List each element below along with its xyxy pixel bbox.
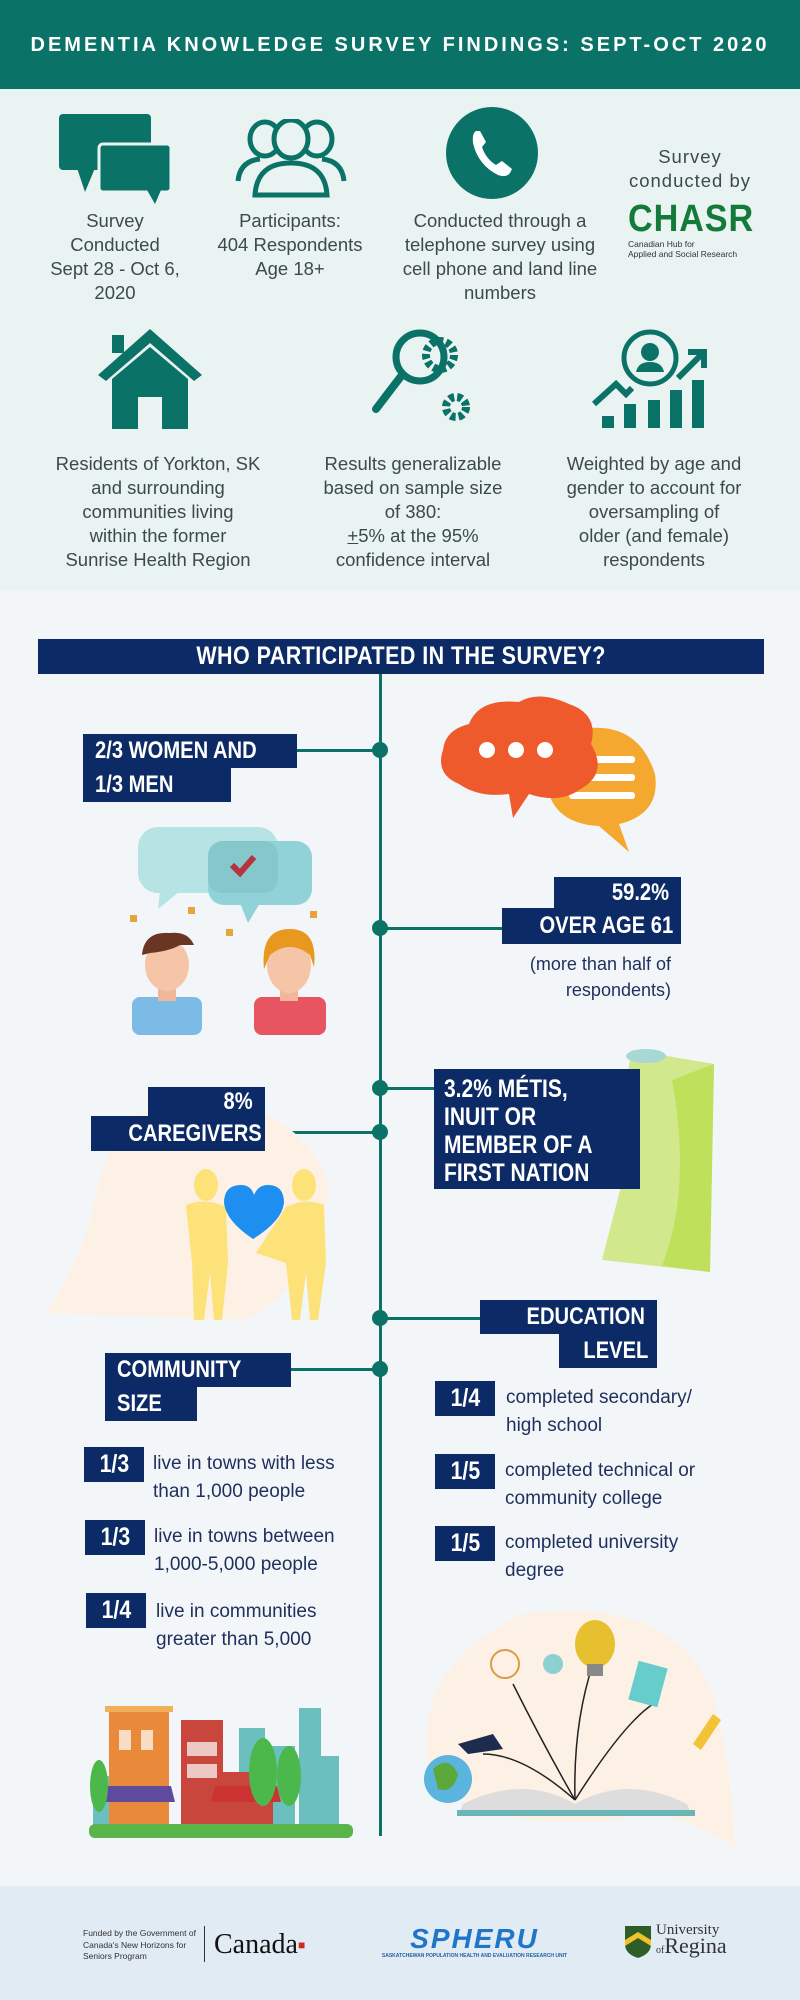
icon: chat bubbles xyxy=(59,114,170,204)
list: community size: greater than 5,000 xyxy=(156,1629,311,1650)
heading: over age 61 xyxy=(502,877,681,944)
footer xyxy=(0,1886,800,2000)
text: telephone: telephone survey using xyxy=(405,234,595,255)
text: weighted: oversampling of xyxy=(589,501,719,522)
logo: canada funding: Canada■ xyxy=(214,1929,305,1960)
logo: University of Regina: ofRegina xyxy=(656,1933,727,1958)
logo: CHASR: Applied and Social Research xyxy=(628,249,737,259)
text: residents: within the former xyxy=(90,525,226,546)
text: residents: communities living xyxy=(82,501,234,522)
text: telephone: Conducted through a xyxy=(414,210,586,231)
heading: metis inuit first nation: FIRST NATION xyxy=(444,1159,589,1187)
text: generalizable: based on sample size xyxy=(324,477,502,498)
text: participants: Participants: xyxy=(239,210,341,231)
illustration: two people with chat xyxy=(130,827,326,1035)
text: generalizable xyxy=(324,453,502,570)
list: education: high school xyxy=(506,1415,602,1436)
logo: canada funding: Funded by the Government of Canada's New Horizons for Seniors Program xyxy=(83,1928,196,1961)
text: weighted: gender to account for xyxy=(567,477,741,498)
title: DEMENTIA KNOWLEDGE SURVEY FINDINGS: SEPT-OCT 2020 xyxy=(31,34,769,56)
text: generalizable: +5% at the 95% xyxy=(347,525,479,546)
list: education: 1/4 xyxy=(450,1384,480,1412)
heading: education level: LEVEL xyxy=(583,1337,648,1364)
timeline line xyxy=(379,674,382,1836)
illustration: town xyxy=(89,1706,353,1838)
heading: women and men: 2/3 WOMEN AND xyxy=(95,737,257,764)
list: community size: 1/3 xyxy=(100,1523,130,1551)
list: education: degree xyxy=(505,1560,564,1581)
text: survey dates xyxy=(50,210,180,303)
list: community size: than 1,000 people xyxy=(153,1481,305,1502)
icon: phone xyxy=(446,107,538,199)
logo: CHASR: Canadian Hub for xyxy=(628,239,695,249)
text: more than half xyxy=(530,954,672,1000)
logo: CHASR xyxy=(628,198,754,259)
connectors xyxy=(297,749,380,752)
text: more than half: respondents) xyxy=(566,980,671,1000)
heading: over age 61: 59.2% xyxy=(612,879,669,906)
text: telephone xyxy=(403,210,597,303)
logo: SPHERU xyxy=(382,1923,567,1959)
heading: metis inuit first nation: MEMBER OF A xyxy=(444,1131,593,1159)
list: community size xyxy=(84,1447,335,1650)
list: community size: live in communities xyxy=(156,1601,316,1622)
text: participants: 404 Respondents xyxy=(217,234,363,255)
heading: caregivers: 8% xyxy=(224,1088,253,1115)
icon: house xyxy=(98,329,202,429)
text: survey conducted by: Survey xyxy=(658,146,722,167)
illustration: open book with ideas xyxy=(424,1610,735,1849)
heading: caregivers: CAREGIVERS xyxy=(128,1120,262,1147)
heading: metis inuit first nation: INUIT OR xyxy=(444,1103,536,1131)
heading: education level xyxy=(480,1300,657,1368)
text: survey dates: 2020 xyxy=(94,282,136,303)
text: residents: Residents of Yorkton, SK xyxy=(56,453,260,474)
text: survey conducted by: conducted by xyxy=(629,170,751,191)
heading: metis inuit first nation xyxy=(434,1069,640,1189)
text: weighted: Weighted by age and xyxy=(567,453,741,474)
header banner xyxy=(0,0,800,89)
list: education: completed secondary/ xyxy=(506,1387,692,1408)
illustration: caregivers with heart xyxy=(46,1110,328,1320)
text: generalizable: of 380: xyxy=(385,501,441,522)
list: education: completed university xyxy=(505,1532,678,1553)
text: residents: and surrounding xyxy=(91,477,225,498)
list: education: community college xyxy=(505,1488,662,1509)
text: participants xyxy=(217,210,363,279)
icon: magnifier with gears xyxy=(372,330,470,421)
section heading bar xyxy=(38,639,764,674)
icon: people xyxy=(236,119,346,198)
list: education: 1/5 xyxy=(450,1529,480,1557)
list: community size: 1,000-5,000 people xyxy=(154,1554,318,1575)
logo: CHASR: CHASR xyxy=(628,198,754,240)
list: community size: live in towns between xyxy=(154,1526,335,1547)
illustration: speech bubbles xyxy=(441,696,656,852)
text: weighted: older (and female) xyxy=(579,525,729,546)
logo: University of Regina xyxy=(625,1922,727,1958)
list: education: completed technical or xyxy=(505,1460,695,1481)
icon: growth chart xyxy=(592,330,707,428)
panel: survey overview xyxy=(0,89,800,590)
logo: SPHERU: SASKATCHEWAN POPULATION HEALTH AND EVALUATION RESEARCH UNIT xyxy=(382,1953,567,1959)
logo: SPHERU: SPHERU xyxy=(410,1923,539,1954)
heading: community size: COMMUNITY xyxy=(117,1356,241,1383)
text: more than half: (more than half of xyxy=(530,954,671,974)
text: survey dates: Conducted xyxy=(70,234,160,255)
heading: women and men: 1/3 MEN xyxy=(95,771,173,798)
heading: metis inuit first nation: 3.2% MÉTIS, xyxy=(444,1075,568,1103)
heading: education level: EDUCATION xyxy=(527,1303,645,1330)
text: participants: Age 18+ xyxy=(255,258,325,279)
text: residents: Sunrise Health Region xyxy=(65,549,251,570)
heading: community size xyxy=(105,1353,291,1421)
text: telephone: numbers xyxy=(464,282,536,303)
logo: canada funding xyxy=(83,1926,305,1962)
heading: caregivers xyxy=(91,1087,265,1151)
text: telephone: cell phone and land line xyxy=(403,258,597,279)
illustration: saskatchewan map xyxy=(602,1049,714,1272)
list: community size: live in towns with less xyxy=(153,1453,335,1474)
section heading bar: WHO PARTICIPATED IN THE SURVEY? xyxy=(196,642,606,670)
text: weighted: respondents xyxy=(603,549,705,570)
text: weighted xyxy=(566,453,742,570)
list: education: 1/5 xyxy=(450,1457,480,1485)
heading: community size: SIZE xyxy=(117,1390,162,1417)
text: residents xyxy=(56,453,260,570)
list: community size: 1/4 xyxy=(101,1596,131,1624)
text: generalizable: confidence interval xyxy=(336,549,490,570)
heading: women and men xyxy=(83,734,297,802)
logo: University of Regina: University xyxy=(656,1922,719,1938)
list: education xyxy=(435,1381,695,1581)
text: survey dates: Survey xyxy=(86,210,144,231)
text: survey dates: Sept 28 - Oct 6, xyxy=(50,258,180,279)
heading: over age 61: OVER AGE 61 xyxy=(539,912,673,939)
list: community size: 1/3 xyxy=(99,1450,129,1478)
text: generalizable: Results generalizable xyxy=(325,453,501,474)
text: survey conducted by xyxy=(629,146,751,191)
